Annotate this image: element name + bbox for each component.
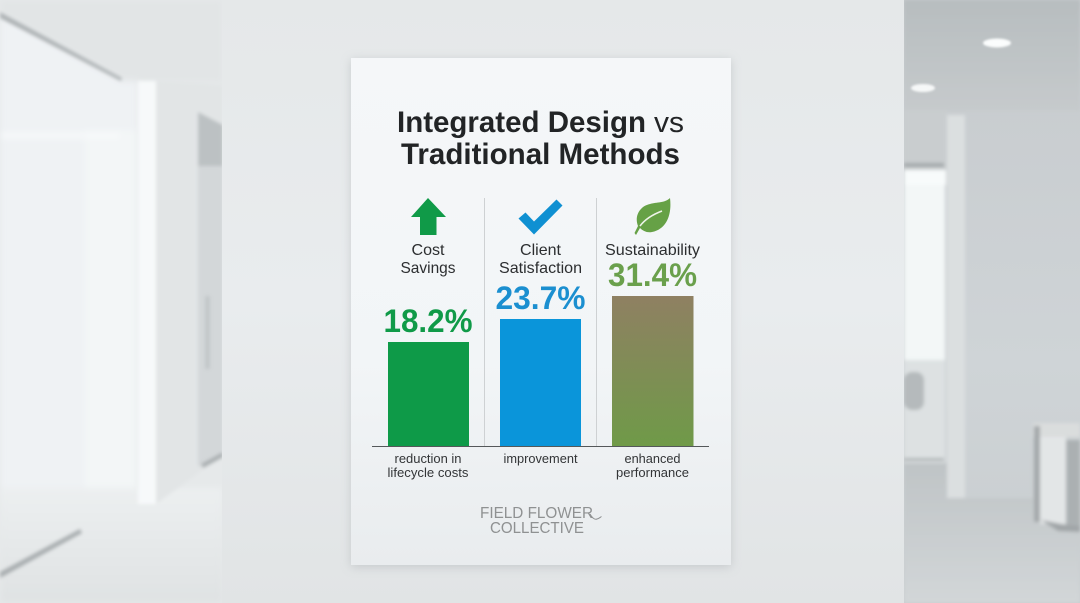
poster panel bbox=[351, 58, 731, 565]
icon: up arrow bbox=[411, 198, 446, 235]
left office background bbox=[0, 0, 223, 603]
column dividers bbox=[484, 198, 596, 446]
chart baseline bbox=[372, 446, 709, 447]
caption: reduction in lifecycle costs bbox=[388, 452, 468, 480]
value: 23.7%: 23.7% bbox=[496, 280, 586, 316]
label: client satisfaction: Client bbox=[520, 242, 562, 259]
icon: leaf bbox=[634, 198, 670, 235]
title: Traditional Methods bbox=[401, 138, 680, 171]
label: cost savings bbox=[400, 242, 456, 277]
label: client satisfaction bbox=[499, 242, 582, 277]
title: vs bbox=[654, 107, 684, 139]
poster shadow bbox=[351, 60, 731, 567]
caption: improvement: improvement bbox=[504, 452, 578, 466]
title bbox=[397, 106, 684, 171]
bar: 18.2% bbox=[388, 342, 469, 446]
caption: reduction in lifecycle costs: lifecycle costs bbox=[388, 466, 468, 480]
column: cost savings bbox=[384, 198, 472, 480]
caption: reduction in lifecycle costs: reduction in bbox=[394, 452, 462, 466]
label: sustainability: Sustainability bbox=[605, 242, 700, 259]
logo: field flower collective: COLLECTIVE bbox=[490, 520, 584, 537]
caption: enhanced performance: enhanced bbox=[624, 452, 681, 466]
right office background bbox=[904, 0, 1080, 603]
logo: field flower collective: FIELD FLOWER bbox=[480, 505, 593, 522]
caption: enhanced performance bbox=[616, 452, 689, 480]
column: sustainability bbox=[605, 198, 700, 480]
label: client satisfaction: Satisfaction bbox=[499, 260, 582, 277]
wall behind poster bbox=[222, 0, 904, 603]
bar: 23.7% bbox=[500, 319, 581, 446]
bar: 31.4% bbox=[612, 296, 694, 446]
value: 31.4%: 31.4% bbox=[608, 257, 697, 293]
label: cost savings: Cost bbox=[412, 242, 445, 259]
value: 18.2%: 18.2% bbox=[384, 303, 472, 339]
logo: field flower collective bbox=[480, 505, 602, 537]
caption: enhanced performance: performance bbox=[616, 466, 689, 480]
label: cost savings: Savings bbox=[400, 260, 456, 277]
icon: check mark bbox=[518, 200, 562, 234]
title: Integrated Design bbox=[397, 106, 646, 139]
column: client satisfaction bbox=[496, 200, 586, 466]
